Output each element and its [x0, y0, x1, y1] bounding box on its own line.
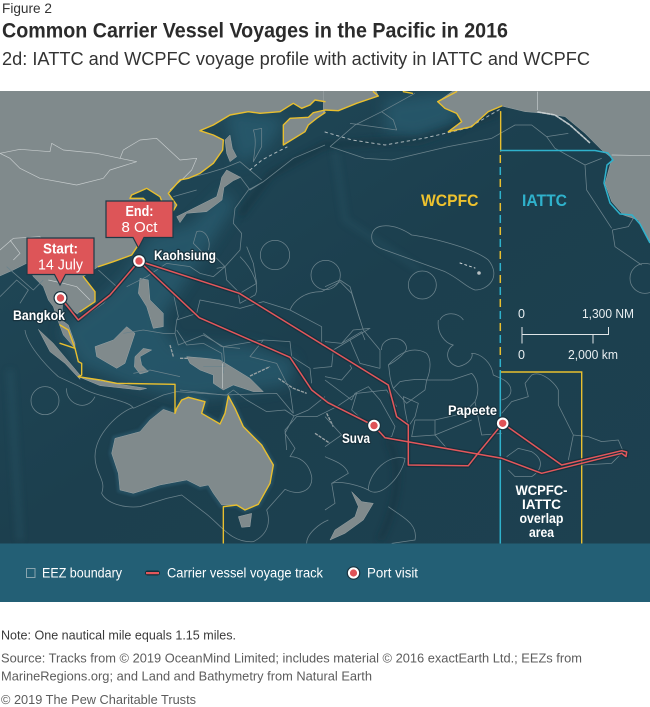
region label: overlap area: IATTC — [522, 497, 561, 512]
EEZ boundaries — [0, 93, 650, 543]
scale bar: 2,000 km — [568, 348, 618, 362]
title: Common Carrier Vessel Voyages in the Pacific in 2016 — [2, 18, 508, 42]
EEZ: central west Pacific — [123, 247, 397, 450]
region label: overlap area: WCPFC- — [516, 483, 568, 498]
EEZ: north-west Pacific — [0, 128, 325, 320]
region label: overlap area — [516, 486, 567, 537]
IATTC coastal boundary — [500, 150, 650, 243]
port marker: Bangkok — [54, 291, 68, 305]
WCPFC coastal boundary — [60, 92, 502, 543]
land: Asia — [0, 88, 325, 348]
region label: IATTC: IATTC — [522, 192, 567, 210]
scale bar — [518, 307, 634, 362]
port label: Papeete: Papeete — [448, 403, 497, 418]
source — [1, 651, 582, 684]
port label: Bangkok: Bangkok — [13, 308, 65, 323]
source: MarineRegions.org; and Land and Bathymetry from Natural Earth — [1, 669, 372, 684]
deep trench shading — [242, 114, 495, 212]
legend: voyage track: Carrier vessel voyage track — [167, 566, 323, 580]
EEZ: south Pacific islands — [325, 320, 623, 543]
EEZ: north-east Pacific — [311, 93, 650, 320]
land: Philippines and Pacific islands — [138, 278, 333, 443]
port marker: Suva — [367, 418, 381, 432]
island chains — [250, 108, 590, 275]
Aleutian chain — [250, 108, 502, 170]
port marker: Kaohsiung — [132, 254, 146, 268]
callout: end date: 8 Oct — [122, 219, 158, 236]
figure label: Figure 2 — [2, 0, 52, 16]
region label: overlap area: area — [529, 525, 554, 540]
callout: start date — [27, 238, 94, 285]
legend: port visit: Port visit — [367, 566, 418, 580]
scale bar: 0 — [518, 307, 525, 321]
land borders — [0, 92, 650, 388]
EEZ: Indian Ocean and Australia — [25, 330, 328, 543]
legend: EEZ boundary: EEZ boundary — [42, 566, 122, 580]
voyage track — [61, 261, 627, 473]
callout: end date: End: — [126, 203, 154, 220]
callout: start date: Start: — [43, 240, 78, 258]
land masses — [0, 88, 650, 540]
map panel — [0, 88, 650, 544]
scale bar: 1,300 NM — [582, 307, 634, 321]
region label: WCPFC: WCPFC — [421, 192, 479, 210]
callout: end date — [106, 201, 173, 248]
port label: Suva: Suva — [342, 431, 370, 446]
source: Source: Tracks from © 2019 OceanMind Limited; includes material © 2016 exactEarth Ltd.; EEZs from — [1, 651, 582, 666]
Alaska panhandle islands — [538, 112, 590, 143]
legend panel — [0, 544, 650, 602]
land: North America and Chukotka — [323, 88, 650, 242]
copyright: © 2019 The Pew Charitable Trusts — [1, 692, 196, 707]
port marker: Papeete — [496, 416, 510, 430]
subtitle: 2d: IATTC and WCPFC voyage profile with activity in IATTC and WCPFC — [2, 48, 590, 69]
overlap area boundary — [500, 372, 582, 544]
boundary between WCPFC and IATTC — [500, 150, 650, 544]
land: Indonesia, Papua and Oceania — [38, 327, 373, 540]
callout: start date: 14 July — [38, 256, 83, 274]
seafloor ridges — [10, 150, 420, 540]
port label: Kaohsiung: Kaohsiung — [154, 248, 216, 263]
shallow sea shading — [60, 92, 462, 400]
Hawaiian islands — [460, 263, 475, 268]
scale bar: 0 — [518, 348, 525, 362]
note: Note: One nautical mile equals 1.15 miles. — [1, 628, 236, 642]
region label: overlap area: overlap — [520, 511, 564, 526]
Australia shelf shading — [112, 396, 273, 510]
